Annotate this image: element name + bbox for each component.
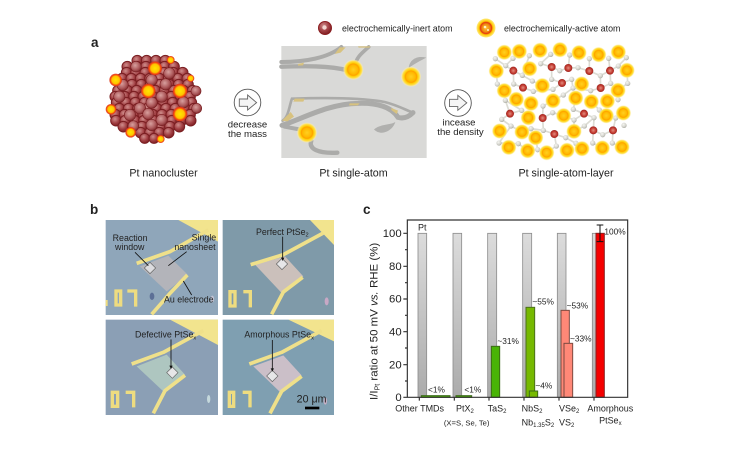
micrograph: perfect PtSe2 [223, 220, 334, 315]
caption: Pt single-atom-layer: Pt single-atom-layer [518, 168, 614, 180]
chart: x-axis category labels: Amorphous [587, 403, 634, 413]
chart: bar value labels: ~55% [532, 296, 554, 306]
micrograph: amorphous PtSex with scale bar: x [311, 335, 314, 341]
micrograph: perfect PtSe2: 2 [306, 233, 309, 239]
chart: y-axis title: I/I [368, 390, 380, 400]
chart: x-axis category labels: 2 [470, 409, 474, 415]
chart: x-axis category labels: 2 [576, 409, 580, 415]
micrograph: amorphous PtSex with scale bar: 20 μm [297, 394, 327, 406]
chart: bar value labels: ~53% [567, 300, 589, 310]
chart: x-axis category labels: 1.35 [533, 423, 545, 429]
chart: x-axis category labels: Other TMDs [395, 403, 445, 413]
chart: x-axis category labels: S [545, 417, 551, 427]
micrograph group [106, 220, 334, 415]
micrograph: reaction window and single nanosheet: nanosheet [174, 242, 216, 252]
chart: x-axis category labels [395, 403, 634, 429]
chart: x-axis category labels: TaS [488, 403, 503, 413]
arrow: increase the density: incease [442, 118, 476, 128]
micrograph: reaction window and single nanosheet: window [114, 242, 145, 252]
panel c: bar chart of current ratio [363, 202, 634, 429]
micrograph: reaction window and single nanosheet [106, 220, 218, 315]
heading: panel label b: b [90, 202, 98, 217]
arrow: increase the density: the density [437, 127, 484, 138]
illustration: Pt single-atom-layer lattice [489, 42, 635, 160]
arrow: decrease the mass: decrease [228, 120, 267, 130]
chart: x-axis category labels: VSe [559, 403, 576, 413]
chart: bar value labels: ~4% [535, 380, 553, 390]
micrograph: defective PtSex [106, 320, 218, 415]
arrow: increase the density [437, 90, 484, 138]
micrograph: reaction window and single nanosheet: Single [192, 233, 216, 243]
micrograph: defective PtSex: Defective PtSe [135, 330, 193, 340]
chart: Pt reference bars [418, 233, 601, 397]
micrograph: amorphous PtSex with scale bar [223, 320, 334, 415]
caption: Pt single-atom: Pt single-atom [319, 168, 388, 180]
chart: y-axis tick labels: 0 [395, 392, 402, 404]
chart: x-axis category labels: NbS [522, 403, 539, 413]
arrow: decrease the mass: the mass [228, 129, 267, 140]
chart: x-axis category labels: 2 [551, 423, 555, 429]
legend: electrochemically-inert atom: electrochemically-inert atom [342, 24, 452, 34]
legend: electrochemically-inert atom [318, 22, 452, 34]
chart: y-axis title: vs. RHE (%) [368, 243, 380, 306]
bar chart [368, 220, 634, 429]
chart: y-axis tick labels: 40 [389, 326, 402, 338]
chart: x-axis category labels: PtX [456, 403, 470, 413]
chart: bar value labels: ~31% [497, 336, 519, 346]
chart: y-axis tick labels [383, 228, 402, 404]
chart: bar value labels [418, 223, 626, 395]
heading: panel label a: a [91, 35, 99, 50]
chart: x-axis category labels: 2 [539, 409, 543, 415]
chart: error bar [597, 225, 603, 242]
chart: bar value labels: ~33% [570, 333, 592, 343]
heading: panel label c: c [363, 202, 371, 217]
chart: y-axis tick labels: 60 [389, 294, 402, 306]
chart: bar value labels: Pt [418, 223, 427, 233]
micrograph: defective PtSex: x [193, 335, 196, 341]
legend: electrochemically-active atom: electrochemically-active atom [504, 24, 620, 34]
legend: electrochemically-active atom [476, 18, 620, 38]
chart: y-axis title: ratio at 50 mV [368, 306, 380, 384]
caption: Pt nanocluster: Pt nanocluster [129, 168, 198, 180]
chart: bar value labels: 100% [604, 227, 626, 237]
chart: x-axis category labels: 2 [503, 409, 507, 415]
chart: x-axis category labels: PtSe [599, 415, 619, 425]
chart: x-axis category labels: Nb [522, 417, 533, 427]
chart: bar value labels: <1% [464, 385, 482, 395]
chart: x-axis category labels: x [619, 421, 622, 427]
chart: x-axis category labels: (X=S, Se, Te) [444, 418, 490, 427]
chart: y-axis tick labels: 100 [383, 228, 402, 240]
chart: y-axis title: Pt [374, 384, 381, 390]
micrograph: reaction window and single nanosheet: Au electrode [164, 294, 214, 304]
illustration: Pt nanocluster [106, 55, 202, 143]
micrograph: amorphous PtSex with scale bar: Amorphous PtSe [244, 330, 311, 340]
chart: axes and ticks [403, 220, 628, 401]
micrograph: reaction window and single nanosheet: Reaction [113, 233, 148, 243]
arrow: decrease the mass [228, 89, 267, 140]
chart: material bars [421, 233, 604, 397]
chart: x-axis category labels: VS [559, 417, 571, 427]
panel a: mass and density progression [91, 18, 635, 180]
chart: y-axis tick labels: 20 [389, 359, 402, 371]
illustration: Pt single-atom micrograph [281, 46, 427, 158]
chart: y-axis tick labels: 80 [389, 261, 402, 273]
micrograph: perfect PtSe2: Perfect PtSe [256, 227, 306, 237]
chart: x-axis category labels: 2 [571, 423, 575, 429]
panel b: device micrographs [90, 202, 334, 415]
chart: bar value labels: <1% [428, 385, 445, 395]
